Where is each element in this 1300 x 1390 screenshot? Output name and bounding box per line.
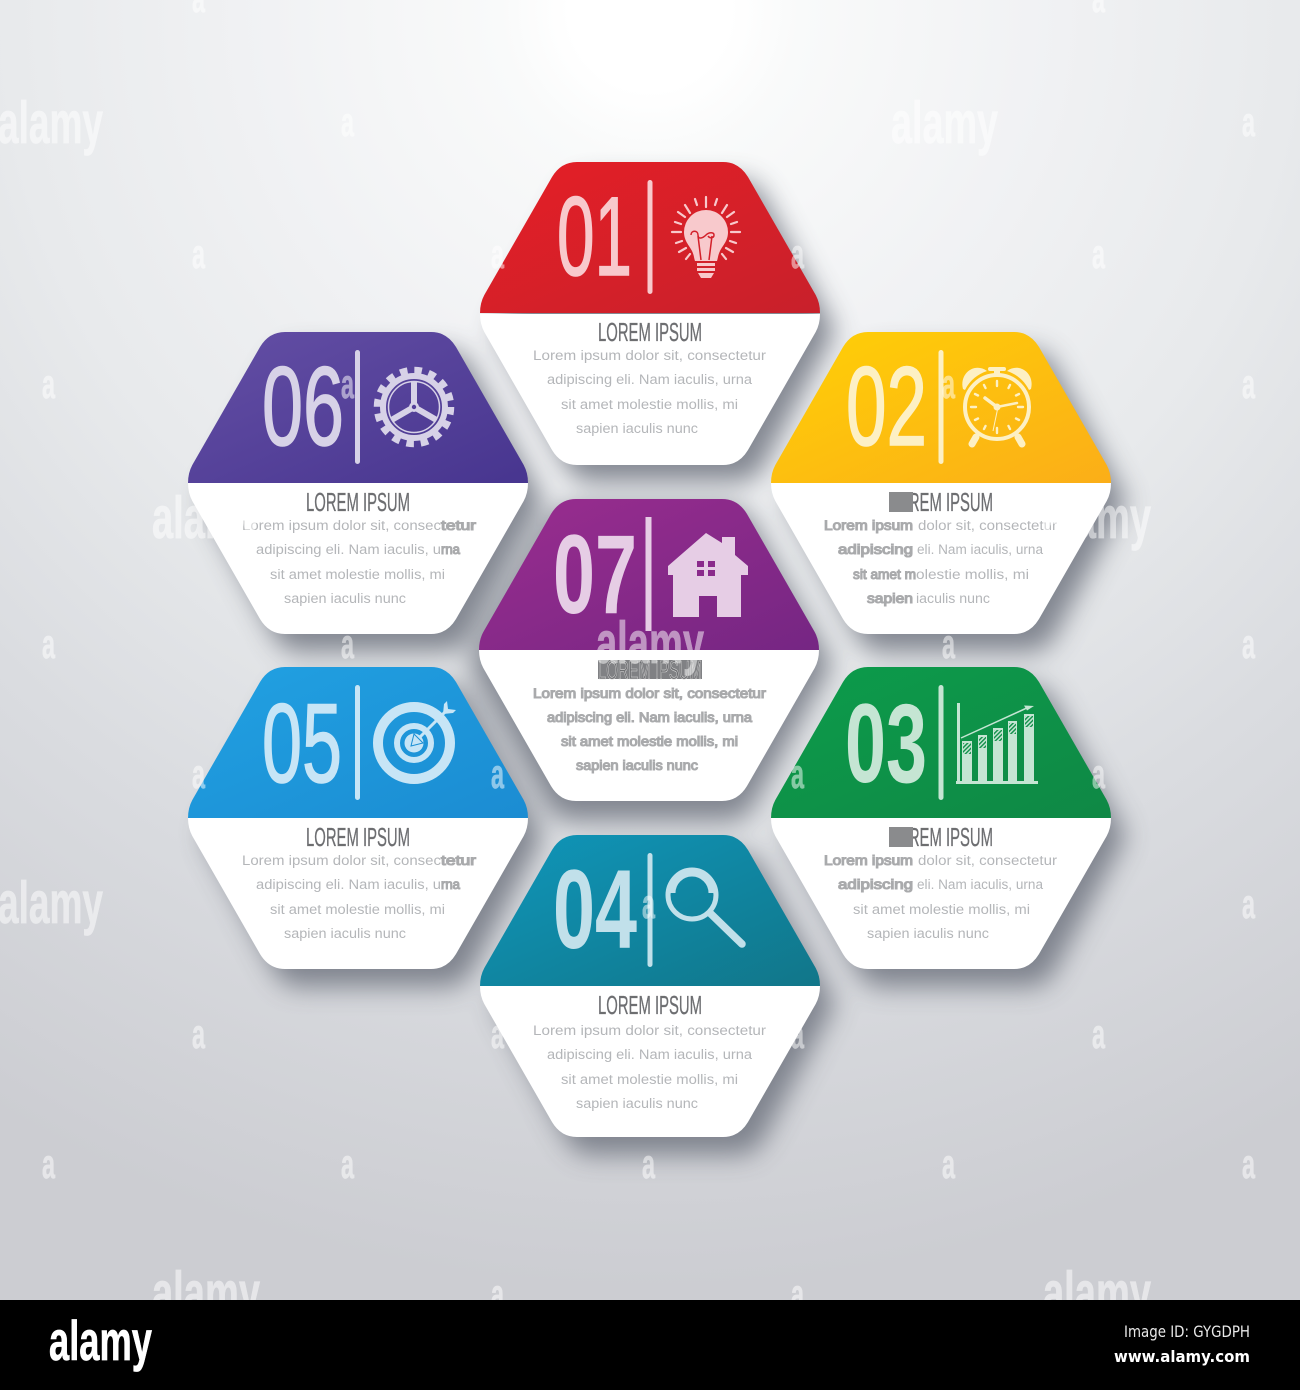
body text 07: sapien iaculis nunc	[576, 758, 698, 773]
panel: step 01	[480, 162, 820, 465]
icon: gear	[378, 370, 450, 444]
heading 02	[889, 487, 993, 517]
body text 02: sapien	[867, 591, 913, 606]
watermark stamps: alamy	[596, 610, 704, 676]
icon: house	[668, 533, 748, 617]
watermark stamps: alamy	[891, 90, 998, 156]
panel: step 04	[480, 835, 820, 1137]
icon: light bulb	[672, 197, 740, 278]
watermark stamps: a	[1092, 1011, 1106, 1057]
website: www.alamy.com	[1114, 1347, 1250, 1366]
watermark stamps: a	[1242, 1141, 1256, 1187]
body text 06: adipiscing eli. Nam iaculis, u	[256, 542, 441, 557]
body text 02: iaculis nunc	[916, 591, 990, 606]
panel: step 06	[188, 332, 528, 634]
watermark stamps: a	[642, 1141, 656, 1187]
body text 01	[533, 348, 767, 436]
body text 05: Lorem ipsum dolor sit, consec	[242, 853, 441, 868]
watermark stamps: a	[491, 231, 505, 277]
watermark stamps: a	[192, 231, 206, 277]
panel: step 02	[771, 332, 1111, 634]
body text 06: rna	[441, 542, 460, 557]
watermark stamps: alamy	[1043, 1260, 1151, 1326]
number 01: 01	[557, 174, 632, 299]
icon: magnifying glass	[668, 871, 742, 944]
heading 07	[598, 655, 702, 685]
watermark stamps: a	[1242, 99, 1256, 145]
watermark stamps: a	[341, 99, 355, 145]
heading 01: LOREM IPSUM	[598, 317, 702, 347]
body text 02: adipiscing	[838, 542, 913, 557]
watermark stamps: a	[791, 751, 805, 797]
body text 06: sit amet molestie mollis, mi	[270, 567, 445, 582]
body text 05: rna	[441, 877, 460, 892]
watermark stamps: a	[192, 1011, 206, 1057]
body text 06: Lorem ipsum dolor sit, consec	[242, 518, 441, 533]
heading 07: LOREM IPSUM	[598, 655, 702, 685]
heading 04: LOREM IPSUM	[598, 990, 702, 1020]
icon: target with arrow	[378, 701, 456, 779]
watermark stamps: alamy	[0, 90, 103, 156]
watermark stamps: alamy	[0, 870, 103, 936]
body text 03: sapien iaculis nunc	[867, 926, 989, 941]
body text 02: eli. Nam iaculis, urna	[917, 542, 1043, 557]
body text 05: sit amet molestie mollis, mi	[270, 902, 445, 917]
body text 06	[242, 518, 477, 606]
body text 04: Lorem ipsum dolor sit, consectetur	[533, 1023, 767, 1038]
body text 03: Lorem ipsum	[824, 853, 913, 868]
number 07: 07	[553, 512, 637, 637]
watermark stamps: a	[192, 751, 206, 797]
watermark stamps: a	[791, 231, 805, 277]
watermark stamps: a	[491, 751, 505, 797]
watermark stamps: a	[1242, 621, 1256, 667]
panel: step 07	[479, 499, 819, 801]
number 06: 06	[262, 344, 344, 469]
image id: Image ID: GYGDPH	[1124, 1322, 1250, 1341]
body text 07: Lorem ipsum dolor sit, consectetur	[533, 686, 767, 701]
watermark stamps: a	[791, 1011, 805, 1057]
watermark stamps: a	[341, 361, 355, 407]
watermark stamps: a	[942, 621, 956, 667]
panel: step 05	[188, 667, 528, 969]
body text 02: dolor sit, consectetur	[918, 518, 1058, 533]
body text 05	[242, 853, 477, 941]
watermark stamps: a	[1092, 231, 1106, 277]
body text 05: tetur	[441, 853, 477, 868]
number 04: 04	[553, 847, 637, 972]
footer band	[0, 1300, 1300, 1390]
body text 03: eli. Nam iaculis, urna	[917, 877, 1043, 892]
body text 03: adipiscing	[838, 877, 913, 892]
watermark stamps: a	[491, 1011, 505, 1057]
watermark stamps: a	[791, 1271, 805, 1317]
number 02: 02	[846, 344, 927, 469]
heading 06: LOREM IPSUM	[306, 487, 410, 517]
body text 02: Lorem ipsum	[824, 518, 913, 533]
watermark stamps: a	[42, 361, 56, 407]
watermark stamps: a	[642, 881, 656, 927]
watermark stamps: a	[942, 1141, 956, 1187]
body text 03: sit amet molestie mollis, mi	[853, 902, 1030, 917]
body text 01: sit amet molestie mollis, mi	[561, 397, 738, 412]
watermark stamps: a	[42, 1141, 56, 1187]
body text 07: adipiscing eli. Nam iaculis, urna	[547, 710, 753, 725]
watermark stamps: a	[42, 621, 56, 667]
body text 06: tetur	[441, 518, 477, 533]
body text 02: sit amet m	[853, 567, 916, 582]
watermark stamps: alamy	[152, 1260, 260, 1326]
watermark stamps: a	[1242, 361, 1256, 407]
body text 02	[824, 518, 1058, 606]
body text 07	[533, 686, 767, 773]
body text 04	[533, 1023, 767, 1111]
body text 05: sapien iaculis nunc	[284, 926, 406, 941]
body text 06: sapien iaculis nunc	[284, 591, 406, 606]
body text 04: adipiscing eli. Nam iaculis, urna	[547, 1047, 753, 1062]
body text 03: dolor sit, consectetur	[918, 853, 1058, 868]
icon: bar chart with arrow	[956, 703, 1038, 784]
body text 04: sapien iaculis nunc	[576, 1096, 698, 1111]
footer logo: alamy	[49, 1309, 152, 1372]
body text 07: sit amet molestie mollis, mi	[561, 734, 738, 749]
watermark stamps: alamy	[1043, 485, 1151, 551]
body text 02: olestie mollis, mi	[916, 567, 1029, 582]
heading 03: LOREM IPSUM	[889, 822, 993, 852]
body text 01: sapien iaculis nunc	[576, 421, 698, 436]
body text 01: Lorem ipsum dolor sit, consectetur	[533, 348, 767, 363]
body text 03	[824, 853, 1058, 941]
number 05: 05	[262, 681, 342, 806]
body text 01: adipiscing eli. Nam iaculis, urna	[547, 372, 753, 387]
watermark stamps: a	[942, 361, 956, 407]
number 03: 03	[845, 681, 927, 806]
watermark stamps: a	[1242, 881, 1256, 927]
heading 03	[889, 822, 993, 852]
heading 02: LOREM IPSUM	[889, 487, 993, 517]
watermark stamps: a	[341, 1141, 355, 1187]
panel: step 03	[771, 667, 1111, 969]
heading 05: LOREM IPSUM	[306, 822, 410, 852]
body text 05: adipiscing eli. Nam iaculis, u	[256, 877, 441, 892]
watermark stamps: a	[491, 1271, 505, 1317]
body text 04: sit amet molestie mollis, mi	[561, 1072, 738, 1087]
icon: alarm clock	[962, 367, 1032, 444]
drop shadows under hexagons	[203, 180, 1126, 1155]
watermark stamps: alamy	[152, 485, 260, 551]
watermark stamps: a	[1092, 751, 1106, 797]
watermark stamps: a	[341, 621, 355, 667]
